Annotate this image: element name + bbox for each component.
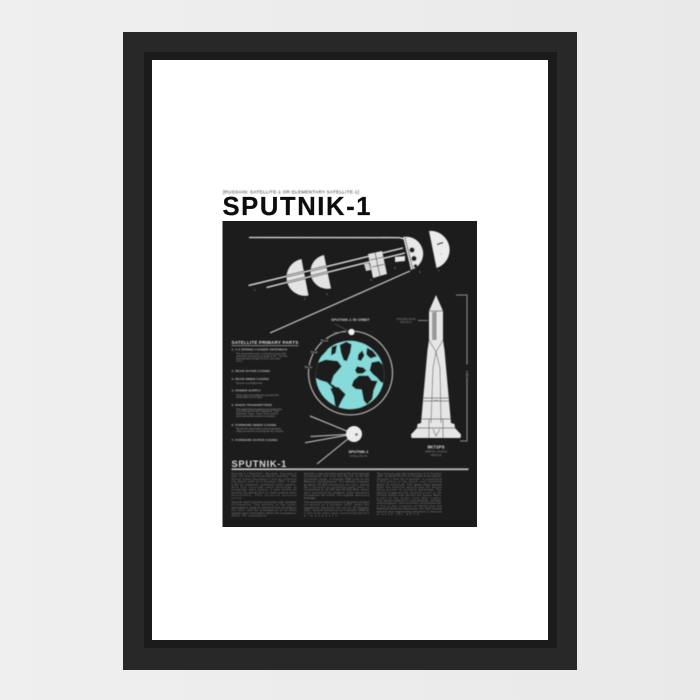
article column 2: for 21 days. (304, 496, 316, 500)
article column 1: Sputnik itself provided scientists with valuable (232, 500, 297, 504)
orbit labels: Stage (310, 350, 318, 354)
orbit labels (304, 338, 329, 369)
greenland (340, 342, 352, 361)
sputnik caption: SPUTNIK-1 (348, 450, 369, 454)
article column 2: atmosphere. (304, 514, 340, 518)
stack mass callout: 269,000 lb (400, 321, 412, 324)
article column 1: atmosphere could be deduced from its drag on (232, 505, 297, 509)
africa (352, 376, 378, 404)
orbit ring (308, 331, 392, 415)
long bottom antenna (270, 271, 410, 333)
article column 2: at about 29,000 kilometres per hour, taking (304, 482, 369, 486)
parts descriptions: Mounts the transmitters and temperature (236, 428, 282, 431)
parts list (232, 340, 298, 442)
article column 2: throughout the world. The signals continued (304, 493, 369, 497)
parts descriptions: up to two-tenths second in duration. (236, 415, 276, 418)
article column 3: a part of the larger Cold War rivalry. (377, 496, 442, 500)
article column 3: 1,440 orbits of the Earth, and travelled (377, 480, 442, 484)
rocket (396, 295, 469, 457)
parts items: 4. POWER SUPPLY (232, 388, 262, 392)
orbit heading: SPUTNIK-1 IN ORBIT (331, 318, 370, 322)
parts descriptions (236, 353, 288, 433)
part numbers: 6 (419, 270, 421, 274)
article column 2: Tyuratam range, in Kazakh SSR (now at the (304, 477, 369, 481)
article column 1: around the Earth and its radio pulses were (232, 490, 297, 494)
parts descriptions: The transmitters broadcast at frequencies (236, 408, 283, 411)
article column 1: information. The density of the upper (232, 503, 297, 507)
satellite exploded diagram (248, 231, 450, 301)
sputnik illustration (305, 416, 369, 464)
article column 2: transmitted on 20.005 and 40.002 MHz, which (304, 488, 369, 492)
parts descriptions: antenna had a length of 2.9 m, the other (236, 357, 281, 360)
parts descriptions: distinctive "beep - beep" tones carried (236, 413, 279, 416)
part numbers (254, 266, 440, 301)
orbiting satellite (333, 324, 355, 335)
article column 1: signals gave information about the ionosphere. (232, 511, 297, 515)
article column 3: It led to the creation of NASA and the (377, 504, 442, 508)
part numbers: 5 (394, 266, 396, 270)
article column 2 (304, 472, 370, 518)
article column 3 (377, 472, 442, 516)
forward outer casing (429, 231, 450, 268)
parts descriptions: relays as well as mounting the fan controls. (236, 430, 284, 433)
article column 3: Union proved its technical advantage. The (377, 488, 442, 492)
parts descriptions: of 20.005 and 40.002 megahertz. Their (236, 410, 279, 413)
parts descriptions: Three silver-zinc batteries provided the (236, 394, 280, 397)
picture frame (123, 32, 577, 670)
article column 3: The launch ushered in new political, military, (377, 498, 442, 502)
article column 2: transmitter batteries ran out on 26 October (304, 505, 369, 509)
article column 3: science and engineering education in America (377, 509, 442, 513)
europe and asia (355, 366, 366, 374)
parts heading: SATELLITE PRIMARY PARTS (232, 340, 298, 345)
article heading: SPUTNIK-1 (232, 459, 287, 469)
article column 1: broadcast radio pulses. It was visible all (232, 488, 297, 492)
rocket structure lines (417, 311, 455, 438)
parts items: 6. FORWARD INNER CASING (232, 423, 277, 427)
rocket body (411, 295, 461, 438)
part numbers: 7 (438, 269, 440, 273)
article column 1: with four external radio antennas to (232, 485, 297, 489)
parts descriptions: Mounts a ventilation fan. (236, 382, 263, 385)
earth (314, 341, 386, 409)
article column 3: technological, and scientific developments. (377, 501, 442, 505)
orbit diagram (304, 318, 392, 415)
parts descriptions: 2.4 m. (236, 360, 243, 363)
article column 1: low Earth orbit on 4 October 1957. It was (232, 480, 297, 484)
article column 2: Baikonur Cosmodrome). The satellite travelled (304, 480, 369, 484)
article column 1: Soviet Union launched it into an elliptical (232, 477, 297, 481)
article column 1: about the ionosphere. (232, 514, 268, 518)
parts items: 1. 4 X SPRING-LOADED ANTENNAS (232, 348, 287, 352)
rear inner casing (310, 255, 331, 289)
north america (314, 360, 342, 388)
article column 2: were monitored by amateur radio operators (304, 490, 370, 494)
article column 3: Sputnik-1 flew for 3 months. It completed (377, 477, 442, 481)
height dimension (456, 295, 469, 441)
power supply and transmitters (364, 251, 387, 278)
orbit labels: Boost (305, 365, 312, 369)
article column 3: 1957, at 19:28:34 UTC on October of the launch. (377, 474, 442, 478)
article column 1 (232, 472, 297, 518)
article column 3: about 70 million km. The Space Race started (377, 482, 442, 486)
article column 2: its launch on 4 October 1957, when the (304, 503, 369, 507)
article column 2: 1957. Sputnik burned up on 4 January 1958 as (304, 508, 370, 512)
article column 1: a 58 cm diameter polished metal sphere, (232, 482, 297, 486)
subtitle: [RUSSIAN: SATELLITE-1 OR ELEMENTARY SATELLITE-1] (223, 190, 359, 194)
article column 3: National Defense Education Act that funded (377, 507, 442, 511)
parts descriptions: antennas mounted at an angle of 35°. The first (236, 355, 288, 358)
part numbers: 4 (370, 278, 372, 282)
article column 3: This launch was the beginning of 4 October (377, 472, 442, 476)
article column 2: Sputnik-1 was launched during the International (304, 472, 369, 476)
article column 3: United States and ignited the Space Race, (377, 493, 442, 497)
part numbers: 2 (304, 297, 306, 301)
long antennas (248, 248, 405, 288)
article column 1: was the first artificial Earth satellite. The (232, 474, 297, 478)
title: SPUTNIK-1 (222, 193, 370, 221)
parts items: 2. REAR OUTER CASING (232, 369, 271, 373)
stack mass callout: STACKED MASS (396, 318, 416, 321)
parts items (232, 348, 287, 442)
article column 3: after the satellite launch and the Soviet (377, 485, 442, 489)
part numbers: 1 (254, 288, 256, 292)
orbit labels: Boost (321, 338, 328, 342)
rear outer casing (286, 259, 308, 296)
article column 3: launch triggered the Sputnik crisis in the (377, 490, 442, 494)
bracket (395, 256, 405, 262)
south america (330, 387, 346, 409)
article section (232, 459, 468, 518)
rocket: VEHICLE (430, 453, 442, 457)
article column 2: 96.2 minutes to complete each orbit. It (304, 485, 369, 489)
poster panel (222, 221, 477, 527)
rocket caption: 8K71PS (427, 444, 445, 450)
article column 1: Sputnik-1 ("Satellite"; Russian: Спутник-1) (232, 472, 297, 476)
article column 3: around the world. (377, 512, 421, 516)
top antenna (249, 238, 405, 239)
article column 1: pulse. (232, 496, 244, 500)
parts items: 3. REAR INNER CASING (232, 377, 270, 381)
article column 1: the orbit, and the propagation of its radio (232, 508, 297, 512)
forward inner casing (403, 237, 423, 270)
parts items: 7. FORWARD OUTER CASING (232, 438, 278, 442)
part numbers: 3 (326, 292, 328, 296)
article column 1: detectable. This surprise success (232, 493, 297, 497)
sputnik illustration: SATELLITE PS (350, 454, 368, 458)
article column 2: The technical achievements of Sputnik included (304, 500, 369, 504)
height dimension: 111 ft (465, 371, 469, 377)
stack mass callout (396, 318, 428, 324)
parts items: 5. RADIO TRANSMITTERS (232, 403, 272, 407)
parts descriptions: transmitters for 22 days. (236, 396, 263, 399)
rocket: ORBITAL LAUNCH (425, 450, 447, 454)
article column 2: it fell from orbit upon reentering Earth's (304, 511, 370, 515)
parts descriptions: The transmitters were connected to four whip (236, 353, 287, 356)
article column 2: Geophysical Year from Site No.1/5, at the 5th (304, 474, 369, 478)
